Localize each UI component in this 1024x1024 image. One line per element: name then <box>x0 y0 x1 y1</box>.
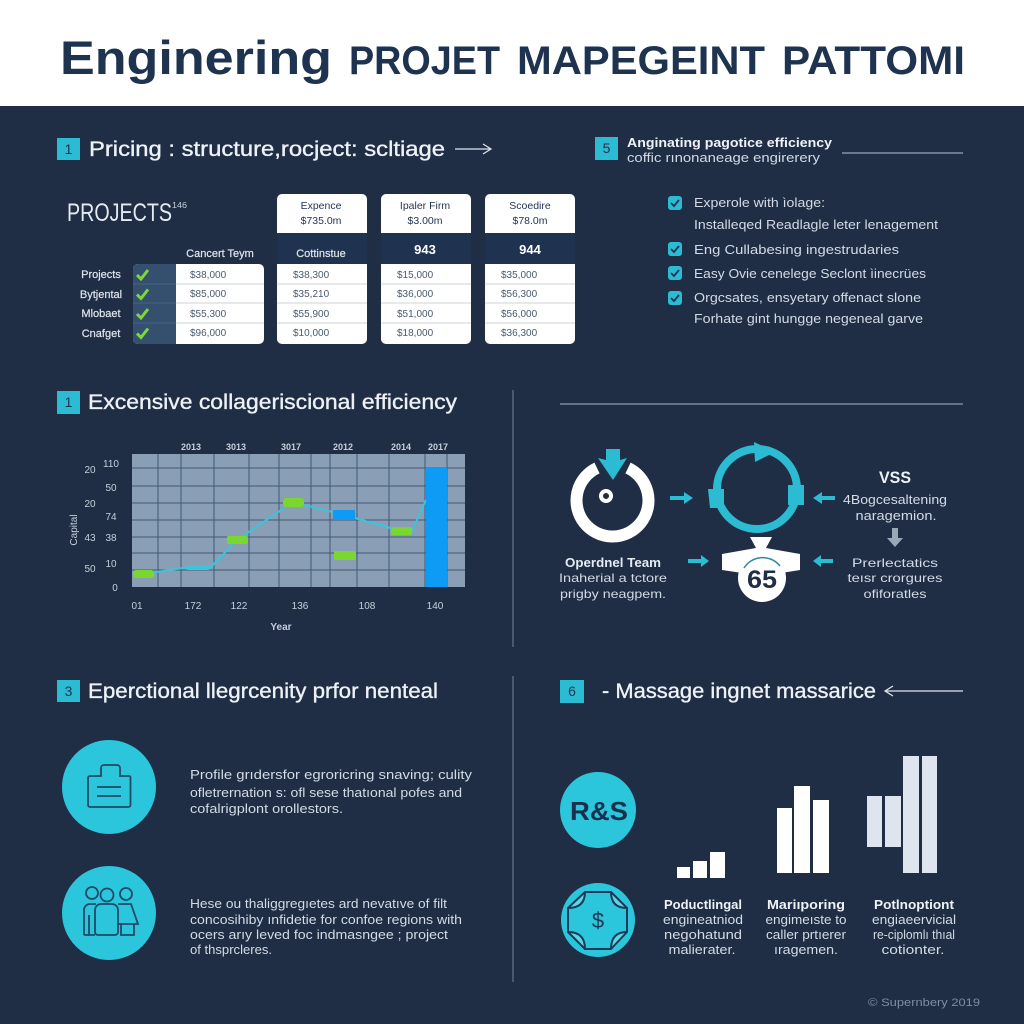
chart top labels: 2014 <box>391 442 411 452</box>
table row labels: Projects <box>81 269 121 281</box>
table column: ipaler firm: $36,000 <box>397 289 434 300</box>
text block: profile: ofletrernation s: ofl sese thatıonal pofes and <box>190 785 462 800</box>
text: prerlectatics: ofiforatles <box>864 587 926 601</box>
bar group small <box>677 852 725 878</box>
checklist: Forhate gint hungge negeneal garve <box>694 311 923 326</box>
title band: PROJET <box>349 39 500 83</box>
table column: expence: $55,900 <box>293 309 330 320</box>
table column: ipaler firm: $15,000 <box>397 270 434 281</box>
table column: current team: Cancert Teym <box>186 248 254 260</box>
text: potnoptiont: engiaeervicial <box>872 913 956 927</box>
checklist: Eng Cullabesing ingestrudaries <box>694 242 900 257</box>
text: mariporing: Mariıporing <box>767 897 845 912</box>
chart x axis labels: 172 <box>185 601 202 612</box>
table row labels: Bytjental <box>80 289 122 301</box>
projects label: PROJECTS <box>67 199 172 227</box>
table column: current team: $38,000 <box>190 270 227 281</box>
table column: scoedire: $78.0m <box>512 215 548 227</box>
chart y axis labels: 10 <box>105 559 117 570</box>
chart y axis labels: 50 <box>105 483 117 494</box>
table column: ipaler firm: $51,000 <box>397 309 434 320</box>
heading: operational: Eperctional llegrcenity prfor nenteal <box>88 680 438 703</box>
text: mariporing: ıragemen. <box>774 943 838 957</box>
process diagram <box>559 442 947 602</box>
table column: expence: Expence <box>301 200 342 212</box>
icon: R&S circle: R&S <box>570 796 628 826</box>
chart top labels: 2017 <box>428 442 448 452</box>
heading: operational: 3 <box>65 683 73 699</box>
table column: current team: $96,000 <box>190 328 227 339</box>
text: vss <box>843 468 947 523</box>
footer credit: © Supernbery 2019 <box>868 997 980 1009</box>
chart y axis labels: 43 <box>84 533 96 544</box>
table column: current team <box>133 248 264 344</box>
heading: massage: 6 <box>568 683 576 699</box>
table column: ipaler firm: $3.00m <box>407 215 443 227</box>
heading: collaboration efficiency: 1 <box>65 394 73 410</box>
heading: efficiency <box>595 135 963 165</box>
icon: dollar circle: $ <box>592 908 604 933</box>
chart top labels: 3013 <box>226 442 246 452</box>
heading: collaboration efficiency: Excensive collageriscional efficiency <box>88 391 458 414</box>
chart top labels: 3017 <box>281 442 301 452</box>
text block: hese: Hese ou thaliggregıetes ard nevatıve of filt <box>190 896 447 911</box>
text: prerlectatics: Prerlectatics <box>852 556 938 570</box>
text: vss: naragemion. <box>856 508 936 523</box>
icon: white target ring <box>577 449 648 536</box>
bar group medium <box>777 786 829 873</box>
icon: R&S circle <box>560 772 636 848</box>
table column: current team: $85,000 <box>190 289 227 300</box>
table row labels: Cnafget <box>82 328 120 340</box>
text: potnoptiont: cotionter. <box>882 943 944 957</box>
text: mariporing: caller prtıerer <box>766 928 846 942</box>
chart x axis labels <box>131 601 444 633</box>
table column: expence: $38,300 <box>293 270 330 281</box>
checklist: Installeqed Readlagle leter lenagement <box>694 217 938 232</box>
text: operdnel team: Operdnel Team <box>565 555 661 570</box>
chart x axis labels: 108 <box>359 601 376 612</box>
title band <box>0 0 1024 106</box>
text: potnoptiont: Potlnoptiont <box>874 897 955 912</box>
heading: massage <box>560 680 963 703</box>
title band: MAPEGEINT <box>517 39 765 83</box>
chart tall bar <box>426 467 447 587</box>
chart markers <box>133 498 412 578</box>
arrows <box>670 492 903 567</box>
table column: ipaler firm: 943 <box>414 242 436 257</box>
table column: scoedire: 944 <box>519 242 542 257</box>
projects label: 146 <box>172 201 188 210</box>
text: poductlingal <box>663 897 743 957</box>
text block: hese <box>190 896 462 957</box>
line and bar chart <box>69 442 465 633</box>
heading: efficiency: 5 <box>603 140 611 156</box>
table column: scoedire: Scoedire <box>509 200 551 212</box>
chart top labels <box>181 442 448 452</box>
checklist <box>668 195 938 326</box>
table column: scoedire: $56,000 <box>501 309 538 320</box>
chart y axis labels: 50 <box>84 564 96 575</box>
icon: cycle ring <box>708 442 804 529</box>
table column: ipaler firm: Ipaler Firm <box>400 200 450 212</box>
text: vss: 4Bogcesaltening <box>843 492 947 507</box>
chart x axis labels: 01 <box>131 601 143 612</box>
heading: pricing structure: Pricing : structure,rocject: scltiage <box>89 138 445 161</box>
heading: efficiency: Anginating pagotice efficiency <box>627 135 833 150</box>
table row labels <box>80 269 122 340</box>
text: potnoptiont: re-ciplomlı thıal <box>873 928 955 942</box>
table column: current team: $55,300 <box>190 309 227 320</box>
table column: scoedire: $36,300 <box>501 328 538 339</box>
table column: expence: Cottinstue <box>296 248 346 260</box>
chart y axis labels: 74 <box>105 512 117 523</box>
icon: team in circle <box>62 866 156 960</box>
checklist: Easy Ovie cenelege Seclont ìinecrües <box>694 266 927 281</box>
divider <box>512 390 514 982</box>
text: mariporing: engimeıste to <box>766 913 847 927</box>
title band: Enginering <box>60 31 332 84</box>
table column: expence: $35,210 <box>293 289 330 300</box>
text: poductlingal: Poductlingal <box>664 897 742 912</box>
heading: massage: - Massage ingnet massarice <box>602 680 876 703</box>
title band: PATTOMI <box>782 39 965 83</box>
table column: expence: $10,000 <box>293 328 330 339</box>
text block: hese: ocers arıy leved foc indmasngee ; project <box>190 927 448 942</box>
chart y axis labels: Capital <box>69 514 80 546</box>
text: operdnel team: Inaherial a tctore <box>559 571 667 585</box>
icon: dollar circle <box>561 883 635 957</box>
text: operdnel team: prigby neagpem. <box>560 587 666 601</box>
table column: scoedire: $35,000 <box>501 270 538 281</box>
chart top labels: 2013 <box>181 442 201 452</box>
chart x axis labels: 136 <box>292 601 309 612</box>
text: potnoptiont <box>872 897 956 957</box>
chart y axis labels: 0 <box>112 583 118 594</box>
table column: scoedire: $56,300 <box>501 289 538 300</box>
chart y axis labels: 20 <box>84 499 96 510</box>
chart line <box>143 500 426 574</box>
pricing table <box>80 194 575 344</box>
bar group large <box>867 756 937 873</box>
text: prerlectatics <box>848 556 942 601</box>
text: poductlingal: malierater. <box>668 943 736 957</box>
chart top labels: 2012 <box>333 442 353 452</box>
text block: hese: concosihiby ınfidetie for confoe regions with <box>190 912 462 927</box>
checklist: Orgcsates, ensyetary offenact slone <box>694 290 921 305</box>
icon: clipboard in circle <box>62 740 156 834</box>
heading: pricing structure: 1 <box>65 141 73 157</box>
chart y axis labels: 110 <box>103 459 119 470</box>
chart x axis labels: Year <box>270 622 292 633</box>
text: operdnel team <box>559 555 667 601</box>
chart y axis labels: 20 <box>84 465 96 476</box>
text block: hese: of thsprcleres. <box>190 942 272 957</box>
table column: ipaler firm <box>381 194 471 344</box>
heading: efficiency: coffic rınonaneage engirerery <box>627 150 821 165</box>
table row labels: Mlobaet <box>81 308 121 320</box>
table column: ipaler firm: $18,000 <box>397 328 434 339</box>
text: poductlingal: engineatniod <box>663 913 743 927</box>
text block: profile <box>190 767 473 816</box>
chart y axis labels: 38 <box>105 533 117 544</box>
checklist: Experole with ìolage: <box>694 195 825 210</box>
chart y axis labels <box>69 459 119 594</box>
text: mariporing <box>766 897 847 957</box>
table column: expence <box>277 194 367 344</box>
chart x axis labels: 122 <box>231 601 248 612</box>
text: vss: VSS <box>879 468 911 487</box>
rule <box>560 403 963 405</box>
chart x axis labels: 140 <box>427 601 444 612</box>
text block: profile: Profile grıdersfor egroricring snaving; culity <box>190 767 473 782</box>
gauge with value 65 <box>722 537 800 602</box>
table column: expence: $735.0m <box>301 215 342 227</box>
text: poductlingal: negohatund <box>664 928 742 942</box>
table column: scoedire <box>485 194 575 344</box>
text: prerlectatics: teısr crorgures <box>848 571 942 585</box>
icons: check boxes <box>668 196 682 305</box>
gauge with value 65: 65 <box>747 566 777 594</box>
text block: profile: cofalrigplont orollestors. <box>190 801 343 816</box>
